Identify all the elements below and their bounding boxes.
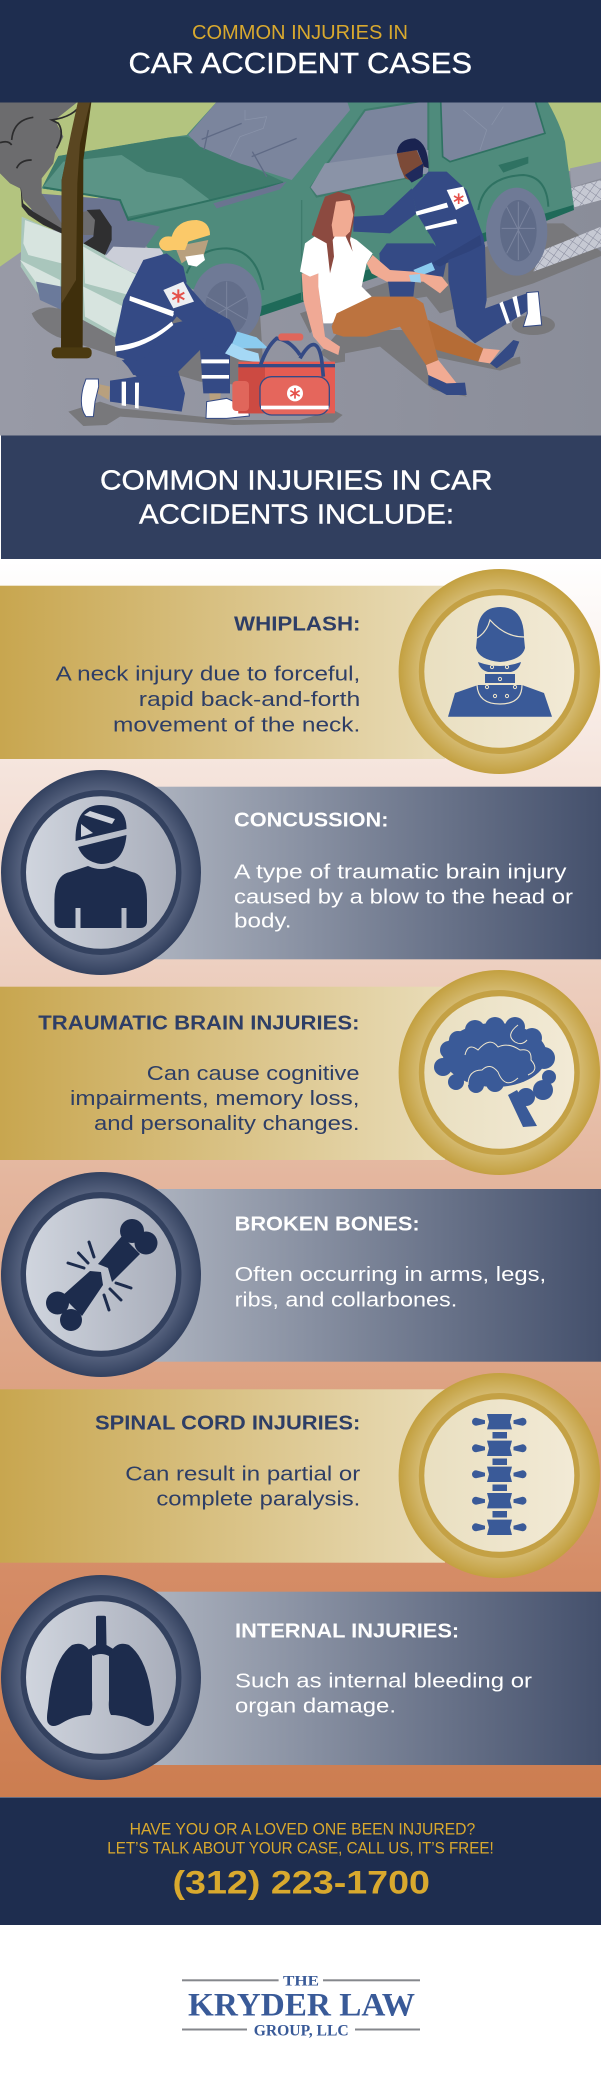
- banner heading line 2: ACCIDENTS INCLUDE:: [139, 498, 454, 530]
- stripes: [416, 203, 521, 324]
- description: Such as internal bleeding or: [235, 1670, 532, 1693]
- logo: The Kryder Law Group: [182, 1974, 420, 2040]
- icon: spine: [472, 1414, 526, 1535]
- title line 1: COMMON INJURIES IN: [192, 22, 408, 44]
- mask: [185, 254, 205, 267]
- torso: [412, 172, 485, 263]
- torso stripes: [115, 296, 175, 352]
- hair: [312, 192, 355, 273]
- neck and face: [175, 240, 208, 263]
- far foot: [478, 348, 500, 363]
- description: and personality changes.: [94, 1112, 360, 1135]
- hair: [397, 138, 429, 168]
- car body: [42, 100, 574, 317]
- description: Can result in partial or: [125, 1463, 360, 1486]
- front door window: [311, 100, 428, 197]
- medallion: [1, 1172, 201, 1377]
- face: [397, 150, 424, 182]
- description: [125, 1463, 360, 1511]
- medallion: [1, 770, 201, 975]
- description: [56, 663, 360, 736]
- heading: CONCUSSION:: [234, 809, 388, 832]
- beard: [405, 163, 423, 183]
- left arm: [302, 273, 340, 355]
- page background: [0, 559, 601, 1797]
- call to action: [0, 1797, 601, 1925]
- description: ribs, and collarbones.: [235, 1289, 457, 1312]
- logo: The Kryder Law Group: GROUP, LLC: [254, 2023, 349, 2040]
- panel: spinal cord injuries: [0, 1373, 600, 1578]
- icon: brain: [434, 1017, 556, 1127]
- panel: whiplash: [0, 569, 600, 774]
- panel: broken bones: [1, 1172, 601, 1377]
- icon: broken bone: [46, 1219, 158, 1331]
- ankle: [98, 384, 221, 400]
- near foot: [426, 360, 457, 385]
- right arm: [367, 255, 448, 293]
- far leg: [413, 320, 483, 362]
- ground shadows: [32, 223, 601, 426]
- rear arch: [478, 175, 548, 210]
- shoes: [81, 379, 99, 417]
- front arch: [187, 248, 263, 290]
- grass: [0, 100, 601, 267]
- side strip: [255, 205, 574, 317]
- face: [332, 200, 353, 237]
- section banner: [1, 436, 601, 559]
- description: body.: [234, 910, 292, 933]
- injured woman: [300, 192, 519, 395]
- description: A type of traumatic brain injury: [234, 860, 567, 883]
- call to action line 1: HAVE YOU OR A LOVED ONE BEEN INJURED?: [130, 1820, 475, 1838]
- back leg: [379, 243, 447, 297]
- medallion: [399, 1373, 600, 1578]
- first aid bag: [232, 333, 335, 415]
- bumper base: [21, 217, 143, 337]
- tire tracks: [533, 180, 601, 272]
- heading: SPINAL CORD INJURIES:: [95, 1412, 360, 1435]
- heading: BROKEN BONES:: [235, 1213, 420, 1236]
- legs: [110, 360, 185, 412]
- smoke: [0, 100, 112, 255]
- headlights: [23, 220, 62, 263]
- pants: [332, 297, 438, 365]
- icon: neck brace: [448, 607, 552, 717]
- armband: [163, 282, 194, 308]
- description: caused by a blow to the head or: [234, 885, 573, 908]
- description: Can cause cognitive: [147, 1062, 360, 1085]
- kneeling paramedic: [353, 138, 542, 343]
- hood: [42, 137, 283, 220]
- gloves: [230, 332, 268, 348]
- road highlight: [570, 162, 601, 187]
- arm: [173, 283, 236, 346]
- shoe: [523, 292, 542, 327]
- arm to woman: [353, 188, 417, 233]
- rear wheel: [486, 188, 547, 276]
- medallion: [399, 970, 600, 1175]
- engine bay: [30, 193, 160, 257]
- phone number: (312) 223-1700: [172, 1864, 430, 1900]
- description: [235, 1263, 546, 1312]
- heading: TRAUMATIC BRAIN INJURIES:: [38, 1011, 360, 1034]
- description: A neck injury due to forceful,: [56, 663, 360, 686]
- arm to wrist: [432, 235, 482, 267]
- illustration: paramedics helping a woman after a car crash: [0, 100, 601, 440]
- road: [0, 170, 601, 436]
- description: rapid back-and-forth: [139, 688, 360, 711]
- rear window: [441, 100, 545, 162]
- header: [0, 0, 601, 102]
- windshield: [188, 100, 350, 180]
- front leg: [448, 245, 532, 343]
- heading: INTERNAL INJURIES:: [235, 1620, 459, 1643]
- armband: [447, 187, 469, 210]
- torso: [115, 253, 187, 362]
- medallion: [1, 1575, 201, 1780]
- description: [235, 1670, 532, 1718]
- description: impairments, memory loss,: [70, 1087, 360, 1110]
- description: [70, 1062, 360, 1135]
- panel: traumatic brain injuries: [0, 970, 600, 1175]
- car: [20, 100, 574, 343]
- description: Often occurring in arms, legs,: [235, 1263, 546, 1286]
- leg stripes: [122, 359, 229, 409]
- description: organ damage.: [235, 1695, 396, 1718]
- panel: concussion: [1, 770, 601, 975]
- shirt: [300, 233, 373, 323]
- front wheel: [193, 264, 262, 335]
- banner heading line 1: COMMON INJURIES IN CAR: [100, 464, 492, 496]
- crumpled hood: [105, 247, 163, 275]
- tree: [52, 100, 92, 358]
- description: complete paralysis.: [156, 1488, 360, 1511]
- panel: internal injuries: [1, 1575, 601, 1780]
- glove: [413, 262, 435, 277]
- logo: The Kryder Law Group: THE: [283, 1974, 319, 1990]
- door handle: [498, 157, 528, 173]
- logo: The Kryder Law Group: KRYDER LAW: [188, 1988, 415, 2024]
- icon: bandaged head: [54, 805, 147, 928]
- description: movement of the neck.: [113, 714, 360, 736]
- description: [234, 860, 573, 933]
- hair: [159, 220, 210, 251]
- icon: lungs: [47, 1616, 154, 1726]
- medallion: [399, 569, 600, 774]
- paramedic with first aid kit: [81, 220, 268, 418]
- call to action line 2: LET’S TALK ABOUT YOUR CASE, CALL US, IT’S FREE!: [107, 1839, 494, 1857]
- title line 2: CAR ACCIDENT CASES: [128, 48, 472, 80]
- heading: WHIPLASH:: [234, 613, 360, 636]
- bandage: [409, 274, 421, 283]
